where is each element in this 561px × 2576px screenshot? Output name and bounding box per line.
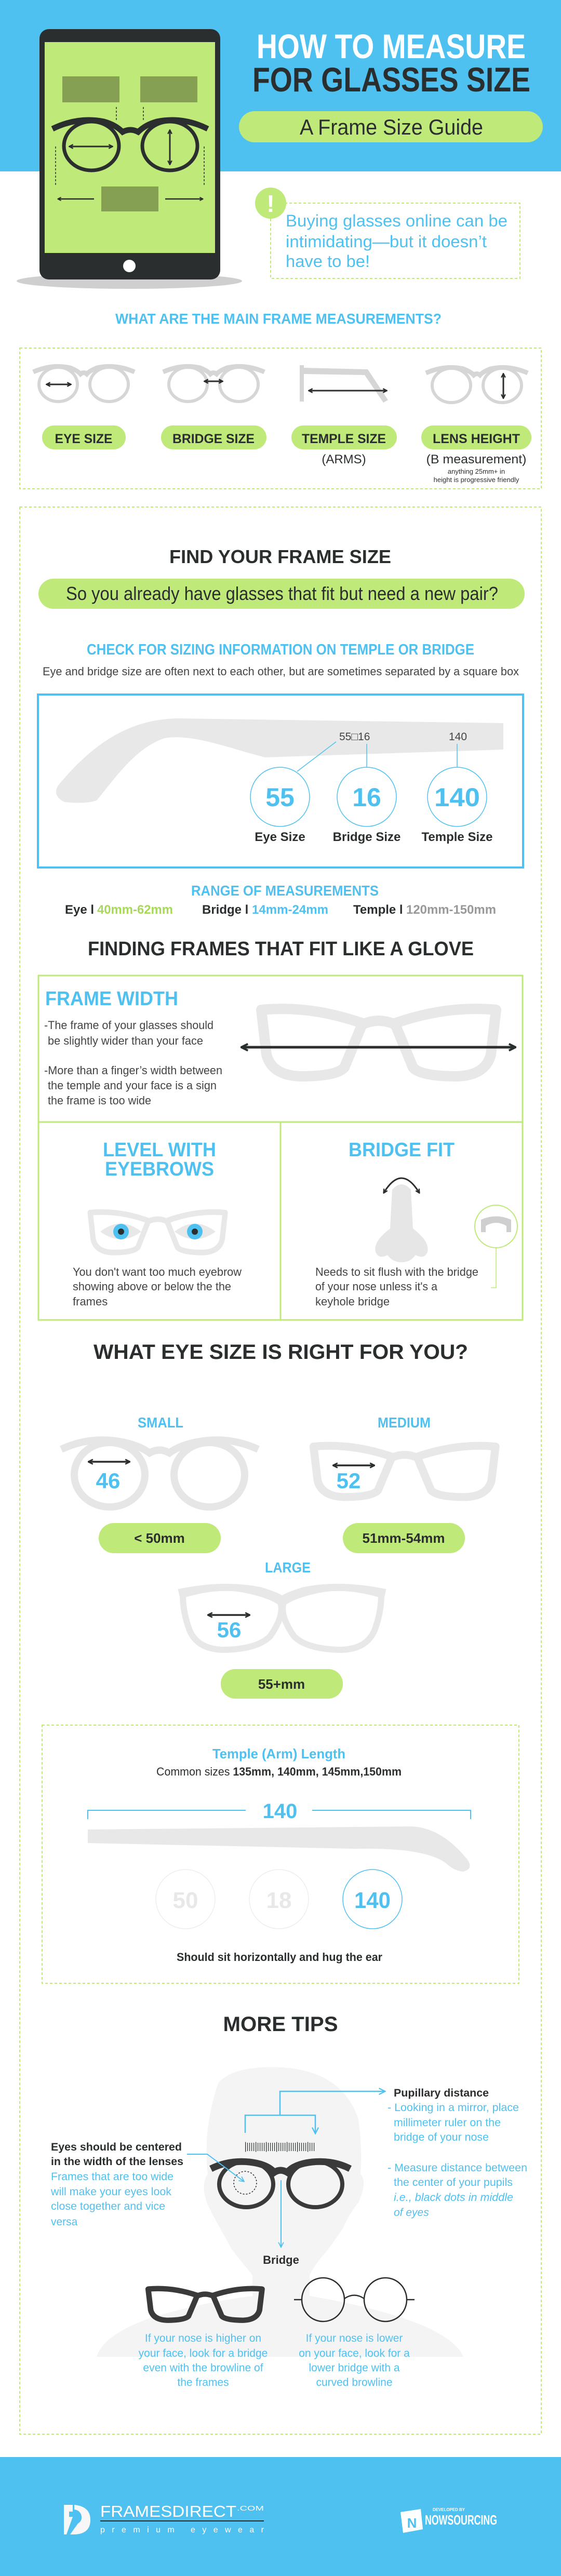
panel: temple arm sizing diagram: 55□16: [339, 731, 370, 743]
panel: small eye size: SMALL: [138, 1414, 183, 1431]
panel: level with eyebrows: [73, 1139, 242, 1308]
text: pupillary distance: - Looking in a mirror, place: [388, 2102, 519, 2114]
text: pupillary distance: of eyes: [394, 2207, 429, 2219]
subtitle pill: [239, 111, 543, 142]
logo: framesdirect: premium eyewear: [100, 2526, 264, 2534]
circle: eye size 55: 55: [265, 783, 295, 812]
panel: level with eyebrows: frames: [73, 1295, 108, 1308]
pill: large range: [221, 1669, 343, 1699]
heading: finding frames that fit: FINDING FRAMES THAT FIT LIKE A GLOVE: [88, 938, 474, 960]
panel: temple arm length: [42, 1725, 519, 1983]
panel: main measurements: (B measurement): [426, 452, 527, 466]
circles: 50 18 140: [156, 1870, 402, 1929]
circles: 50 18 140: 50: [173, 1888, 198, 1913]
text: ranges: Temple l: [353, 903, 403, 917]
logo: nowsourcing: NOWSOURCING: [425, 2512, 497, 2528]
text: eyes should be centered: Frames that are too wide: [51, 2171, 173, 2183]
panel: small eye size: [61, 1414, 258, 1553]
header band: [0, 0, 561, 171]
panel: main measurements: [20, 348, 541, 489]
pill: bridge size: [161, 425, 266, 449]
text: nose lower: on your face, look for a: [299, 2347, 410, 2359]
text: pupillary distance: i.e., black dots in middle: [394, 2192, 513, 2204]
pill: medium range: 51mm-54mm: [363, 1530, 445, 1546]
text: ranges: 120mm-150mm: [406, 903, 496, 917]
text: pupillary distance: Pupillary distance: [394, 2087, 489, 2099]
text: sizing note: Eye and bridge size are often next to each other, but are sometimes separated by a square box: [43, 665, 519, 678]
panel: frame width: [44, 988, 515, 1107]
pill: lens height: LENS HEIGHT: [433, 432, 520, 446]
circle: temple size 140: Temple Size: [422, 830, 492, 844]
heading: what eye size: WHAT EYE SIZE IS RIGHT FOR YOU?: [94, 1341, 468, 1364]
callout: buying online: [255, 188, 520, 278]
text: eyes should be centered: [50, 2141, 183, 2228]
arrow: curved around nose: [384, 1178, 419, 1193]
arrow: eye center pointer: [187, 2154, 244, 2181]
icon: temple arm: [88, 1826, 470, 1872]
text: ranges: [65, 903, 496, 917]
text: ranges: 40mm-62mm: [97, 903, 173, 917]
callout: buying online: have to be!: [286, 252, 370, 271]
circle: eye size 55: [250, 767, 310, 844]
panel: bridge fit: BRIDGE FIT: [349, 1139, 455, 1161]
text: ranges: 14mm-24mm: [252, 903, 328, 917]
panel: frame width: FRAME WIDTH: [45, 988, 178, 1010]
panel: find your frame size (outer dashed box): [20, 507, 541, 2434]
text: nose lower: [299, 2332, 410, 2388]
pill: bridge size: BRIDGE SIZE: [172, 432, 255, 446]
subtitle pill: A Frame Size Guide: [300, 115, 483, 139]
icon: lens height glasses: [426, 367, 528, 403]
panel: frame width: the frame is too wide: [48, 1094, 151, 1107]
panel: large eye size: LARGE: [265, 1559, 311, 1576]
panel: medium eye size: MEDIUM: [378, 1414, 431, 1431]
panel: temple arm sizing diagram: 140: [449, 731, 467, 743]
icon: ruler: [245, 2143, 316, 2151]
panel: temple arm length: Common sizes 135mm, 140mm, 145mm,150mm: [156, 1765, 402, 1778]
pill: lens height: [421, 425, 531, 449]
logo: nowsourcing: DEVELOPED BY: [433, 2507, 465, 2512]
panel: temple arm length: Temple (Arm) Length: [212, 1746, 345, 1761]
icon: round wire glasses: [294, 2278, 415, 2321]
panel: bridge fit: of your nose unless it's a: [315, 1280, 438, 1293]
text: pupillary distance: - Measure distance between: [388, 2162, 527, 2174]
callout: buying online: intimidating—but it doesn’t: [286, 232, 487, 251]
circle: bridge size 16: Bridge Size: [333, 830, 400, 844]
panel: bridge fit: [315, 1139, 517, 1308]
icon: eye size glasses: [33, 366, 135, 402]
panel: frame width: be slightly wider than your face: [48, 1034, 203, 1047]
icon: keyhole bridge: [475, 1205, 517, 1288]
panel: temple arm length: Should sit horizontally and hug the ear: [177, 1951, 382, 1964]
pill: already have glasses: [38, 579, 525, 609]
text: pupillary distance: bridge of your nose: [394, 2131, 489, 2143]
text: nose higher: the frames: [177, 2377, 229, 2388]
circles: 50 18 140: 140: [354, 1888, 391, 1913]
panel: main measurements: (ARMS): [322, 452, 366, 466]
pill: temple size: [291, 425, 397, 449]
panel: bridge fit: keyhole bridge: [315, 1295, 390, 1308]
panel: main measurements: height is progressive friendly: [434, 476, 519, 484]
panel: frame width: -More than a finger’s width between: [44, 1064, 222, 1077]
icon: temple: [300, 365, 388, 403]
panel: level with eyebrows: EYEBROWS: [105, 1158, 214, 1180]
pill: large range: 55+mm: [258, 1676, 305, 1692]
circle: temple size 140: [422, 767, 492, 844]
dimension line 140: [88, 1800, 471, 1823]
heading: more tips: MORE TIPS: [223, 2013, 338, 2036]
text: nose lower: curved browline: [316, 2377, 393, 2388]
text: pupillary distance: [388, 2087, 527, 2219]
text: nose lower: lower bridge with a: [309, 2362, 400, 2374]
icon: eyes behind glasses: [90, 1212, 225, 1252]
circles: 50 18 140: 18: [266, 1888, 291, 1913]
callout: buying online: Buying glasses online can be: [286, 211, 507, 230]
pill: medium range: [343, 1523, 465, 1553]
pill: already have glasses: So you already have glasses that fit but need a new pair?: [66, 583, 498, 604]
text: nose higher: If your nose is higher on: [145, 2332, 261, 2344]
panel: level with eyebrows: LEVEL WITH: [103, 1139, 216, 1161]
pill: small range: < 50mm: [134, 1530, 185, 1546]
arrow: pupillary connector: [245, 2091, 384, 2133]
panel: large eye size: 56: [217, 1618, 241, 1642]
heading: find your frame size: FIND YOUR FRAME SIZE: [169, 546, 391, 567]
circle: bridge size 16: 16: [352, 783, 381, 812]
dimension line 140: 140: [263, 1800, 297, 1823]
panel: fit grid: [38, 976, 523, 1320]
icon: exclamation: !: [266, 190, 275, 217]
pill: eye size: [42, 425, 126, 449]
panel: small eye size: 46: [96, 1469, 120, 1493]
text: eyes should be centered: Eyes should be centered: [51, 2141, 182, 2153]
panel: frame width: -The frame of your glasses should: [44, 1019, 213, 1032]
title: [252, 27, 530, 99]
arrow: bridge pointer: [280, 2180, 282, 2247]
illustration: head with glasses: [97, 2067, 463, 2357]
panel: level with eyebrows: You don't want too much eyebrow: [73, 1265, 242, 1278]
panel: frame width: the temple and your face is a sign: [48, 1079, 217, 1092]
text: eyes should be centered: close together and vice: [51, 2200, 165, 2212]
text: ranges: Bridge l: [202, 903, 248, 917]
subheading: range of measurements: RANGE OF MEASUREMENTS: [191, 883, 379, 899]
circle: bridge size 16: [333, 767, 400, 844]
text: nose higher: even with the browline of: [143, 2362, 263, 2374]
text: pupillary distance: millimeter ruler on the: [394, 2117, 501, 2129]
pill: temple size: TEMPLE SIZE: [302, 432, 386, 446]
illustration: head with glasses: Bridge: [263, 2253, 299, 2266]
panel: main measurements: anything 25mm+ in: [448, 468, 505, 475]
text: eyes should be centered: in the width of the lenses: [51, 2156, 183, 2168]
panel: level with eyebrows: showing above or below the the: [73, 1280, 231, 1293]
text: eyes should be centered: will make your eyes look: [50, 2186, 172, 2198]
subheading: check sizing info: CHECK FOR SIZING INFORMATION ON TEMPLE OR BRIDGE: [87, 642, 474, 658]
icon: exclamation: [255, 188, 286, 219]
circle: temple size 140: 140: [434, 783, 480, 812]
text: ranges: Eye l: [65, 903, 94, 917]
icon: nose: [375, 1184, 428, 1262]
logo: nowsourcing: [400, 2507, 497, 2533]
icon: wide cat-eye glasses: [261, 1009, 496, 1076]
circle: eye size 55: Eye Size: [255, 830, 305, 844]
panel: temple arm sizing diagram: [38, 695, 523, 867]
text: nose higher: [139, 2332, 268, 2388]
text: nose higher: your face, look for a bridge: [139, 2347, 268, 2359]
logo: framesdirect: [64, 2502, 264, 2534]
text: pupillary distance: the center of your pupils: [394, 2177, 513, 2188]
text: nose lower: If your nose is lower: [306, 2332, 403, 2344]
logo: framesdirect: FRAMESDIRECT: [100, 2502, 236, 2520]
panel: bridge fit: Needs to sit flush with the bridge: [315, 1265, 478, 1278]
pill: small range: [99, 1523, 221, 1553]
icon: dark round glasses: [211, 2161, 350, 2207]
pill: eye size: EYE SIZE: [55, 432, 112, 446]
heading: main frame measurements: WHAT ARE THE MAIN FRAME MEASUREMENTS?: [115, 311, 442, 327]
logo: framesdirect: .COM: [237, 2504, 264, 2512]
panel: medium eye size: 52: [337, 1469, 360, 1493]
icon: tablet with glasses: [17, 29, 242, 289]
icon: dark cat-eye glasses: [148, 2289, 262, 2320]
text: eyes should be centered: versa: [51, 2216, 78, 2228]
footer: [0, 2457, 561, 2576]
logo: nowsourcing: N: [407, 2515, 417, 2531]
icon: bridge size glasses: [163, 366, 264, 402]
panel: large eye size: [179, 1559, 385, 1699]
panel: medium eye size: [314, 1414, 496, 1553]
